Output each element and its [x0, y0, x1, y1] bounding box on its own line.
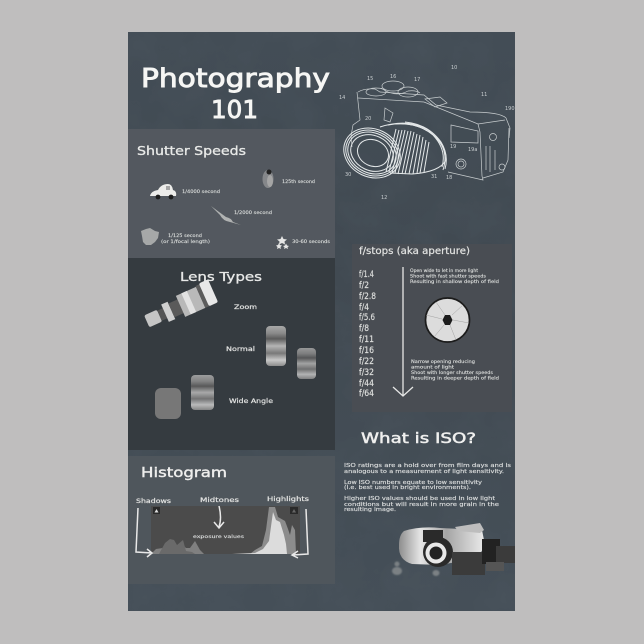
- f-number list: f/64: [359, 389, 374, 399]
- label: 1/4000 second: 1/4000 second: [182, 189, 220, 195]
- normal lens photo large: [266, 326, 286, 366]
- f-number list: f/1.4: [359, 270, 374, 280]
- title: 101: [211, 95, 258, 124]
- normal lens photo small: [297, 348, 316, 379]
- icon: penguin: [262, 170, 274, 188]
- narrow aperture text: [411, 359, 499, 382]
- arrow: highlights: [292, 509, 308, 558]
- camera part numbers: 19a: [468, 147, 477, 153]
- narrow aperture text: amount of light: [411, 364, 454, 370]
- label: highlights: Highlights: [267, 496, 309, 503]
- f-number list: f/4: [359, 303, 369, 313]
- f-number list: [359, 270, 376, 399]
- camera part numbers: 17: [414, 77, 420, 83]
- label: 30-60 seconds: 30-60 seconds: [292, 239, 331, 245]
- zoom lens photo: [141, 279, 218, 332]
- icon: flower: [141, 228, 159, 245]
- heading: what is ISO: What is ISO?: [361, 431, 476, 447]
- f-number list: f/11: [359, 335, 374, 345]
- camera patent drawing: [336, 65, 515, 201]
- wide aperture text: [410, 268, 499, 285]
- camera part numbers: 11: [481, 92, 487, 98]
- ISO paragraph 3: conditions but will result in more grain in the: [344, 502, 500, 508]
- wide aperture text: Resulting in shallow depth of field: [410, 279, 499, 285]
- f-number list: f/16: [359, 346, 374, 356]
- camera part numbers: 190: [505, 106, 515, 112]
- ISO paragraph 1: ISO ratings are a hold over from film days and is: [344, 463, 511, 469]
- camera part numbers: 31: [431, 174, 437, 180]
- ISO paragraph 2: [344, 480, 483, 491]
- camera part numbers: 18: [446, 175, 452, 181]
- heading: lens types: Lens Types: [180, 269, 262, 284]
- wide angle lens photo large: [191, 375, 214, 410]
- title: [141, 64, 330, 124]
- title: Photography: [141, 64, 330, 94]
- camera part numbers: 10: [451, 65, 457, 71]
- ISO paragraph 2: (i.e. best used in bright environments).: [344, 485, 471, 491]
- icon: bird: [211, 206, 241, 225]
- label: 1/focal length: (or 1/focal length): [161, 239, 210, 245]
- icon: aperture: [426, 298, 470, 342]
- f-number list: f/2: [359, 281, 369, 291]
- ISO paragraph 2: Low ISO numbers equate to low sensitivity: [344, 480, 483, 486]
- ISO paragraph 3: [344, 496, 500, 513]
- f-number list: f/44: [359, 379, 374, 389]
- narrow aperture text: Shoot with longer shutter speeds: [411, 370, 494, 376]
- decorative plants: [392, 562, 440, 576]
- icon: car: [150, 184, 176, 199]
- label: wide angle: Wide Angle: [229, 398, 273, 405]
- ISO paragraph 3: Higher ISO values should be used in low light: [344, 496, 496, 502]
- camera part numbers: 12: [381, 195, 387, 201]
- camera part numbers: 19: [450, 144, 456, 150]
- label: normal: Normal: [226, 346, 255, 353]
- heading: histogram: Histogram: [141, 466, 227, 481]
- camera part numbers: 14: [339, 95, 345, 101]
- panel: f/stops: [352, 244, 512, 412]
- panel: histogram: [128, 456, 335, 584]
- arrow: shadows: [136, 508, 152, 557]
- narrow aperture text: Resulting in deeper depth of field: [411, 376, 499, 382]
- wide aperture text: Open wide to let in more light: [410, 268, 478, 274]
- camera lens rings: [336, 119, 446, 187]
- f-number list: f/22: [359, 357, 374, 367]
- ISO paragraph 1: analogous to a measurement of light sensitivity.: [344, 469, 504, 475]
- wide aperture text: Shoot with fast shutter speeds: [410, 274, 487, 280]
- icon: stars: [276, 236, 289, 249]
- ISO paragraph 3: resulting image.: [344, 507, 396, 513]
- label: 1/2000 second: 1/2000 second: [234, 210, 272, 216]
- f-number list: f/2.8: [359, 292, 376, 302]
- ISO paragraph 1: [344, 463, 511, 475]
- arrow: midtones: [214, 506, 224, 528]
- camera part numbers: 15: [367, 76, 373, 82]
- arrow: aperture direction: [393, 267, 413, 396]
- camera part numbers: 30: [345, 172, 351, 178]
- f-number list: f/5.6: [359, 313, 375, 323]
- chalkboard background: [128, 32, 515, 611]
- panel: shutter speeds: [128, 129, 335, 258]
- label: 1/125 second: 1/125 second: [168, 233, 202, 239]
- histogram chart: [151, 506, 300, 554]
- label: shadows: Shadows: [136, 498, 171, 505]
- f-number list: f/32: [359, 368, 374, 378]
- camera part numbers: [339, 65, 515, 201]
- wide angle lens photo small: [155, 388, 181, 419]
- f-number list: f/8: [359, 324, 369, 334]
- heading: f/stops: f/stops (aka aperture): [359, 246, 470, 257]
- label: midtones: Midtones: [200, 497, 239, 504]
- section: what is ISO: [344, 431, 515, 576]
- heading: shutter speeds: Shutter Speeds: [137, 143, 246, 158]
- label: exposure values: exposure values: [193, 534, 245, 540]
- label: zoom: Zoom: [234, 304, 257, 311]
- narrow aperture text: Narrow opening reducing: [411, 359, 475, 365]
- label: 125th second: 125th second: [282, 179, 315, 185]
- camera part numbers: 20: [365, 116, 371, 122]
- compact film camera photo: [399, 523, 515, 575]
- panel: lens types: [128, 258, 335, 450]
- camera part numbers: 16: [390, 74, 396, 80]
